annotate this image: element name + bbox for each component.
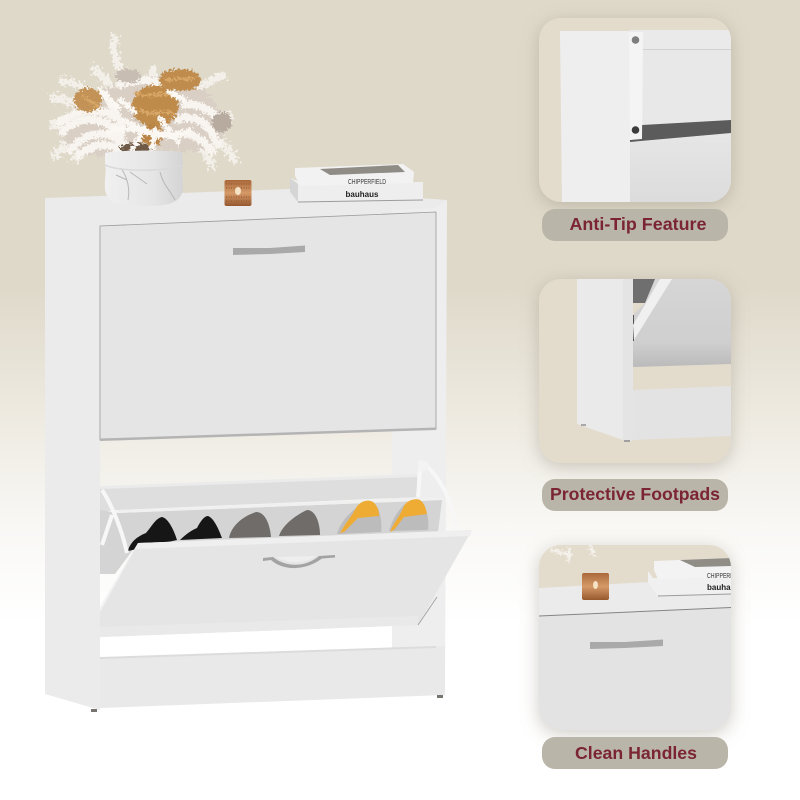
label: protective footpads: Protective Footpads (550, 484, 720, 504)
close-up photo: door handle: CHIPPERFIELD (707, 571, 745, 580)
card background (539, 279, 731, 463)
right hinge arm (418, 462, 456, 530)
label: clean handles: Clean Handles (575, 743, 697, 763)
card background (539, 545, 731, 730)
books (648, 571, 731, 585)
dried orange blooms (74, 88, 102, 112)
label: anti-tip feature: Anti-Tip Feature (570, 214, 707, 234)
upper book: chipperfield: CHIPPERFIELD (348, 179, 386, 186)
panel: protective footpads (539, 279, 731, 463)
lower open compartment back panel (100, 475, 417, 512)
panel: clean handles (539, 545, 745, 730)
bottom plinth (100, 646, 445, 708)
label: clean handles (542, 737, 728, 769)
cabinet top surface (45, 189, 447, 226)
panel: anti-tip feature (539, 18, 731, 202)
label: anti-tip feature (542, 209, 728, 241)
strap screws (632, 36, 639, 44)
open door handle (263, 555, 335, 568)
cabinet right side panel (392, 200, 447, 696)
stacked books (290, 164, 423, 202)
close-up photo: door handle: bauhaus (707, 583, 740, 592)
candle (582, 573, 609, 600)
orange and white sneakers (337, 505, 381, 534)
close-up photo: cabinet foot (577, 279, 731, 442)
black shoes (128, 517, 177, 551)
anti-tip strap (629, 32, 643, 140)
top flap door (100, 212, 436, 441)
close-up photo: door handle (539, 545, 745, 730)
door handle (590, 640, 663, 649)
footpads (581, 424, 586, 426)
cabinet left side panel (45, 198, 100, 710)
flower vase arrangement (52, 38, 234, 206)
lower book: bauhaus: bauhaus (346, 190, 379, 199)
marble vase (105, 151, 183, 206)
label: protective footpads (542, 479, 728, 511)
close-up photo: anti-tip strap (560, 30, 731, 202)
left hinge arm (102, 490, 127, 553)
card background (539, 18, 731, 202)
amber glass candle (224, 180, 252, 206)
top door handle (233, 246, 305, 255)
grey shoes (229, 512, 271, 538)
shoes (128, 499, 428, 551)
pale foliage (52, 38, 234, 165)
open flap door (100, 530, 472, 637)
cabinet feet (91, 695, 443, 712)
shoe cabinet (45, 189, 472, 712)
